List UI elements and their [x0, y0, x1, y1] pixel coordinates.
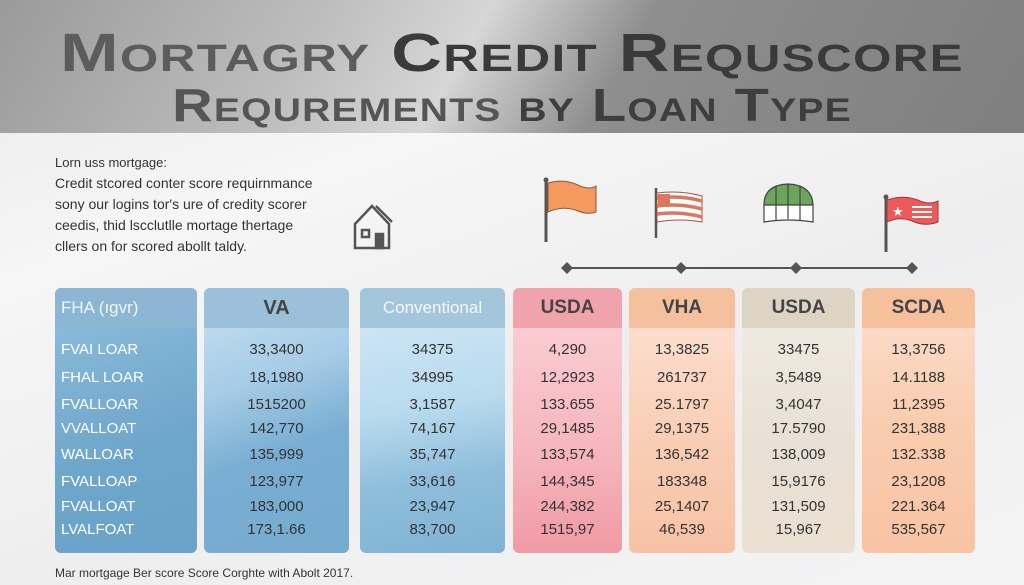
column: FHA labels: FVALLOAP: [61, 473, 137, 490]
column: USDA 2: [742, 288, 855, 553]
column: VA: 33,3400: [249, 341, 304, 358]
column: SCDA: 11,2395: [892, 396, 945, 413]
column: Conventional: 3,1587: [410, 396, 455, 413]
column: VHA: 25,1407: [655, 498, 709, 515]
column: USDA: 29,1485: [540, 420, 595, 437]
column: USDA: 144,345: [540, 473, 595, 490]
column: USDA 2: 3,5489: [776, 369, 821, 386]
column: SCDA: SCDA: [892, 297, 945, 318]
column: USDA: 12,2923: [540, 369, 595, 386]
column: VHA: VHA: [662, 297, 702, 318]
intro text: cllers on for scored abollt taldy.: [55, 238, 247, 254]
column: Conventional: 83,700: [410, 521, 455, 538]
column: VA: 135,999: [249, 446, 304, 463]
column: Conventional: 74,167: [410, 420, 455, 437]
column: Conventional: 34995: [412, 369, 453, 386]
column: USDA 2: USDA: [772, 297, 825, 318]
intro text: ceedis, thid lscclutlle mortage thertage: [55, 217, 293, 233]
column: VA: 183,000: [249, 498, 304, 515]
column: VA: 18,1980: [249, 369, 304, 386]
column: SCDA: 132.338: [891, 446, 946, 463]
flag 4: ★: [892, 204, 904, 219]
column: Conventional: [360, 288, 505, 553]
column: SCDA: [862, 288, 975, 553]
column: SCDA: 23,1208: [891, 473, 946, 490]
column: Conventional: Conventional: [383, 298, 482, 317]
intro text: [55, 155, 313, 254]
column: VA: 1515200: [247, 396, 306, 413]
column: FHA labels: FHA (ıgvr): [61, 298, 138, 317]
column: USDA 2: 17.5790: [771, 420, 826, 437]
column: USDA: [513, 288, 622, 553]
column: USDA: 1515,97: [540, 521, 595, 538]
column: FHA labels: FHAL LOAR: [61, 369, 144, 386]
intro text: Credit stcored conter score requirnmance: [55, 175, 313, 191]
column: Conventional: 35,747: [410, 446, 455, 463]
column: VHA: 46,539: [659, 521, 705, 538]
column: Conventional: 34375: [412, 341, 453, 358]
intro text: sony our logins tor's ure of credity scorer: [55, 196, 307, 212]
column: USDA 2: 15,967: [776, 521, 821, 538]
column: SCDA: 14.1188: [892, 369, 945, 386]
column: FHA labels: [55, 288, 197, 553]
column: VA: 123,977: [249, 473, 304, 490]
title line 1: Mortagry Credit Requscore: [60, 23, 964, 83]
column: FHA labels: FVAI LOAR: [61, 341, 138, 358]
column: VA: VA: [263, 297, 290, 319]
column: USDA: 133.655: [540, 396, 595, 413]
column: SCDA: 231,388: [891, 420, 946, 437]
column: Conventional: 33,616: [410, 473, 455, 490]
icon: house: [354, 204, 393, 250]
column: USDA: 4,290: [549, 341, 586, 358]
column: VHA: 261737: [657, 369, 707, 386]
column: USDA: 244,382: [540, 498, 595, 515]
column: USDA 2: 15,9176: [771, 473, 826, 490]
column: FHA labels: FVALLOAR: [61, 396, 138, 413]
column: SCDA: 13,3756: [891, 341, 946, 358]
column: FHA labels: WALLOAR: [61, 446, 134, 463]
title line 2: Requrements by Loan Type: [172, 79, 852, 131]
column: USDA: 133,574: [540, 446, 595, 463]
column: SCDA: 535,567: [891, 521, 946, 538]
column: FHA labels: VVALLOAT: [61, 420, 136, 437]
flag 1: [544, 178, 596, 242]
column: VA: 142,770: [249, 420, 304, 437]
column: USDA 2: 3,4047: [776, 396, 821, 413]
intro text: Lorn uss mortgage:: [55, 155, 167, 170]
column: VHA: 13,3825: [655, 341, 709, 358]
flags and timeline: [544, 178, 938, 274]
column: FHA labels: LVALFOAT: [61, 521, 134, 538]
column: VHA: 29,1375: [655, 420, 709, 437]
title band: [0, 0, 1024, 133]
column: USDA 2: 131,509: [771, 498, 826, 515]
column: Conventional: 23,947: [410, 498, 455, 515]
column: VHA: 183348: [657, 473, 707, 490]
column: USDA: USDA: [541, 297, 594, 318]
flag 4: [884, 194, 938, 252]
flag 2: [656, 188, 702, 238]
timeline: [561, 262, 918, 274]
column: SCDA: 221.364: [891, 498, 946, 515]
column: VA: [204, 288, 349, 553]
column: VHA: [629, 288, 735, 553]
footer: Mar mortgage Ber score Score Corghte with Abolt 2017.: [55, 566, 353, 580]
column: FHA labels: FVALLOAT: [61, 498, 135, 515]
column: VA: 173,1.66: [247, 521, 306, 538]
column: VHA: 25.1797: [655, 396, 709, 413]
column: USDA 2: 138,009: [771, 446, 826, 463]
dome: [764, 184, 813, 222]
column: USDA 2: 33475: [778, 341, 819, 358]
column: VHA: 136,542: [655, 446, 709, 463]
